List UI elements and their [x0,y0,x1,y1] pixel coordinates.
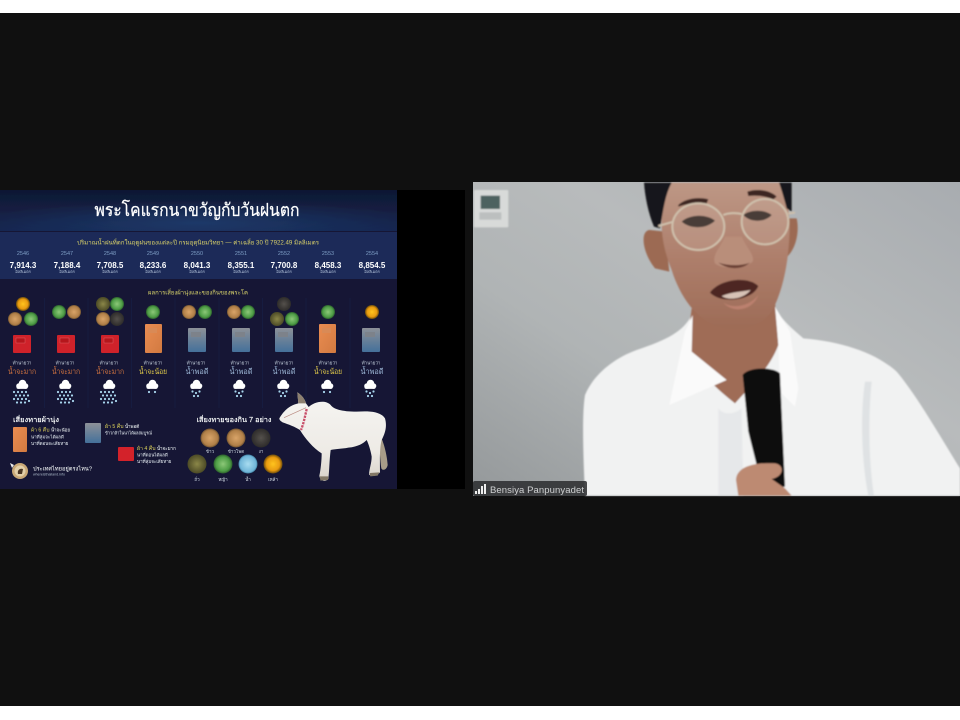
column 2546: น้ำจะมาก [8,366,36,376]
year 2549 [140,251,167,274]
legend: 6 khuep cloth [13,426,70,452]
year 2551: 8,355.1 [228,261,255,270]
column 2550: น้ำพอดี [186,366,209,376]
column 2554: น้ำพอดี [360,366,384,376]
mouth [710,280,758,300]
white shirt [583,307,960,496]
legend: 4 khuep cloth: นาที่ดอนได้ผลดี [137,452,168,458]
food: corn: ข้าวโพด [228,448,244,454]
year 2547: 7,188.4 [54,261,81,270]
year 2549: 2549 [147,251,159,257]
year 2550: 8,041.3 [184,261,211,270]
year 2551 [228,251,255,274]
year 2550: 2550 [191,251,203,257]
ears [644,218,798,272]
food: corn [226,428,246,454]
column 2553: ทำนายว่า [319,360,338,366]
year 2546: มิลลิเมตร [15,270,31,274]
year 2546: 7,914.3 [10,261,37,270]
results heading: ผลการเสี่ยงผ้านุ่งและของกินของพระโค [148,288,248,296]
signal icon [475,484,486,494]
year 2548: 2548 [104,251,116,257]
column 2554: ทำนายว่า [362,360,381,366]
wall thermostat [474,190,508,227]
column 2551 [227,305,255,397]
microphone [743,369,785,490]
year 2552: 7,700.8 [271,261,298,270]
column 2548: น้ำจะมาก [96,366,124,376]
food: rice: ข้าว [206,449,215,454]
food: beans: ถั่ว [194,476,200,482]
source logo: ประเทศไทยอยู่ตรงไหน? [33,466,92,472]
legend: 6 khuep cloth: นาที่ดอนจะเสียหาย [31,440,69,446]
year 2549: 8,233.6 [140,261,167,270]
column 2546 [8,297,38,404]
year 2549: มิลลิเมตร [145,270,161,274]
column 2549: ทำนายว่า [144,360,163,366]
panel: infographic slide [0,190,397,489]
food: sesame [252,428,270,454]
food: beans [188,454,206,482]
year 2554: มิลลิเมตร [364,270,380,274]
food: sesame: งา [259,449,264,454]
panel: rainfall statistics [0,232,397,279]
year 2548: 7,708.5 [97,261,124,270]
column 2552: ทำนายว่า [275,360,294,366]
title: พระโคแรกนาขวัญกับวันฝนตก [94,199,300,220]
column 2554 [360,305,384,397]
year 2551: 2551 [235,251,247,257]
legend: 5 khuep cloth: ข้าวกล้าในนาได้ผลสมบูรณ์ [105,430,152,436]
year 2552: 2552 [278,251,290,257]
illustration: white sacred ox [279,392,388,481]
year 2547 [54,251,81,274]
year 2553: มิลลิเมตร [320,270,336,274]
neck [687,302,778,403]
name tag [473,481,587,496]
black slide margin [397,190,465,489]
column 2551: น้ำพอดี [230,366,253,376]
food: water: น้ำ [245,476,251,482]
food: water [238,454,258,482]
column 2553: น้ำจะน้อย [314,366,342,376]
source logo [10,463,92,479]
legend: 6 khuep cloth: นาที่ลุ่มจะได้ผลดี [31,434,64,440]
column 2547: ทำนายว่า [56,360,75,366]
food: grass [214,454,232,482]
column 2548 [96,297,124,404]
nose [714,237,753,268]
panel: presenter video [473,182,960,496]
year 2552 [271,251,298,274]
year 2553 [315,251,342,274]
eyes [682,211,772,227]
column 2550 [182,305,212,397]
legend: 4 khuep cloth: นาที่ลุ่มจะเสียหาย [137,458,172,465]
food: liquor [264,454,282,482]
year 2546: 2546 [17,251,29,257]
legend: 6 khuep cloth: ผ้า 6 คืบ น้ำจะน้อย [31,426,70,434]
year 2547: 2547 [61,251,73,257]
food: rice [200,428,220,454]
column 2548: ทำนายว่า [100,360,119,366]
column 2546: ทำนายว่า [13,360,32,366]
face [662,183,790,329]
year 2551: มิลลิเมตร [233,270,249,274]
panel: title band [0,190,397,231]
column 2553 [314,305,342,393]
column 2551: ทำนายว่า [231,360,250,366]
year 2548: มิลลิเมตร [102,270,118,274]
presenter name: Bensiya Panpunyadet [490,485,584,496]
cloth legend heading: เสี่ยงทายผ้านุ่ง [13,415,59,424]
food: liquor: เหล้า [268,477,278,482]
legend: 5 khuep cloth [85,423,152,443]
year 2554: 8,854.5 [359,261,386,270]
year 2548 [97,251,124,274]
year 2550: มิลลิเมตร [189,270,205,274]
shirt collar [669,307,798,407]
year 2553: 2553 [322,251,334,257]
column 2547: น้ำจะมาก [52,366,80,376]
year 2554: 2554 [366,251,378,257]
food legend heading: เสี่ยงทายของกิน 7 อย่าง [196,415,272,424]
year 2553: 8,458.3 [315,261,342,270]
year 2554 [359,251,386,274]
legend: 4 khuep cloth: ผ้า 4 คืบ น้ำจะมาก [137,445,176,452]
column 2552 [270,297,299,397]
hand [736,463,792,496]
column 2547 [52,305,81,404]
source logo: whereisthailand.info [33,472,65,476]
column 2550: ทำนายว่า [187,360,206,366]
eyebrows [678,190,777,207]
hair [644,183,792,228]
year 2552: มิลลิเมตร [276,270,292,274]
head [644,183,798,329]
food: grass: หญ้า [218,477,228,482]
legend: 4 khuep cloth [118,445,176,465]
column 2549 [139,305,167,393]
rainfall subtitle: ปริมาณน้ำฝนที่ตกในฤดูฝนของแต่ละปี กรมอุตุนิยมวิทยา — ค่าเฉลี่ย 30 ปี 7922.49 มิลลิเมตร [77,236,320,246]
column 2552: น้ำพอดี [272,366,296,376]
legend: 5 khuep cloth: ผ้า 5 คืบ น้ำพอดี [105,423,139,430]
year 2550 [184,251,211,274]
column 2549: น้ำจะน้อย [139,366,167,376]
glasses [658,199,795,250]
year 2547: มิลลิเมตร [59,270,75,274]
year 2546 [10,251,37,274]
